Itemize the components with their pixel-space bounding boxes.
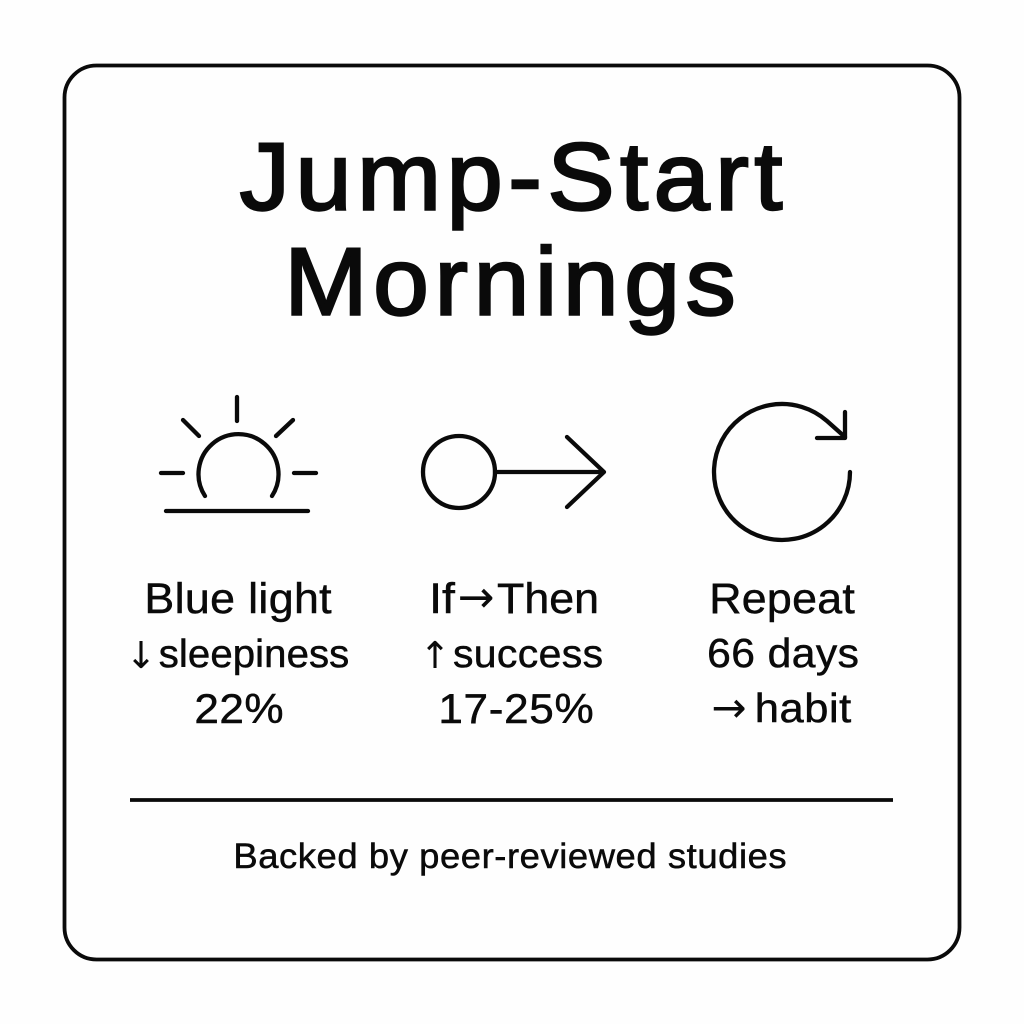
- icon: sunrise: [161, 397, 316, 511]
- title: [240, 123, 782, 335]
- panel: outer frame: [64, 66, 960, 960]
- stat: sleepiness: sleepiness: [159, 633, 349, 676]
- stat: habit: →: [711, 683, 747, 732]
- stat: 17-25 percent: 17-25%: [438, 686, 594, 733]
- title: Mornings: [284, 227, 736, 335]
- stat: habit: habit: [755, 685, 852, 731]
- stat: sleepiness: ↓: [125, 634, 157, 677]
- text block: blue light: [125, 575, 349, 733]
- icon: circle with arrow: [423, 436, 604, 508]
- text block: if then: →: [458, 572, 494, 623]
- text block: blue light: Blue light: [144, 575, 332, 623]
- stat: 22 percent: 22%: [194, 686, 284, 733]
- text block: repeat: [707, 575, 859, 732]
- text block: if then: Then: [497, 575, 599, 623]
- footer note: Backed by peer-reviewed studies: [233, 837, 787, 876]
- title: Jump-Start: [240, 123, 782, 230]
- stat: success: success: [453, 633, 603, 676]
- text block: if then: If: [429, 575, 455, 623]
- stat: habit: [711, 683, 852, 732]
- text block: repeat: Repeat: [709, 575, 855, 623]
- stat: success: ↑: [419, 634, 451, 677]
- stat: 66 days: 66 days: [707, 630, 859, 676]
- icon: repeat loop: [714, 404, 850, 540]
- text block: if then: [419, 572, 603, 733]
